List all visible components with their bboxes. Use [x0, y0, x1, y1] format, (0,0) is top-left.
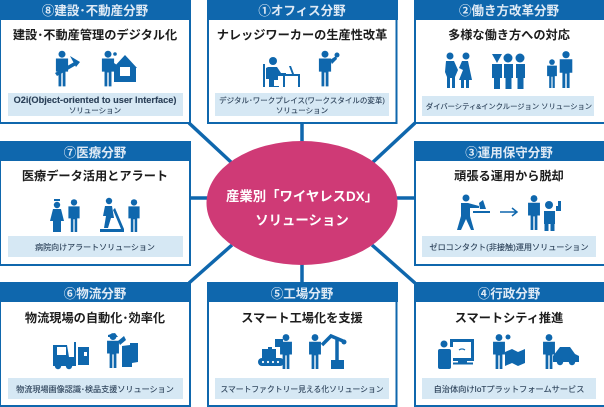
icon: forklift and inspector [53, 333, 138, 369]
connector lines [189, 122, 415, 284]
title: 2: 多様な働き方への対応 [448, 27, 570, 42]
title: 4: スマートシティ推進 [455, 310, 563, 325]
heading: 4: ④行政分野 [478, 286, 541, 301]
title: 3: 頑張る運用から脱却 [454, 168, 564, 183]
heading: 2: ②働き方改革分野 [459, 3, 559, 18]
heading: 8: ⑧建設･不動産分野 [42, 3, 149, 18]
panel: 8 construction [0, 0, 191, 123]
solution label: 6 [8, 378, 183, 399]
solution label: 5: スマートファクトリー見える化ソリューション [220, 385, 384, 394]
heading: 5: ⑤工場分野 [271, 286, 334, 301]
panel: 7 medical [0, 141, 191, 265]
icon: diverse people [445, 51, 572, 89]
panel: 1 office [207, 0, 398, 123]
solution label: 8: ソリューション [69, 106, 121, 115]
title: 1: ナレッジワーカーの生産性改革 [217, 27, 387, 42]
solution label: 4 [422, 378, 596, 399]
solution label: 2 [422, 96, 594, 116]
icon: worker to robot [457, 194, 561, 231]
solution label: 3: ゼロコンタクト(非接触)運用ソリューション [429, 242, 589, 252]
solution label: 4: 自治体向けIoTプラットフォームサービス [434, 384, 584, 394]
icon: screen, map, car [438, 334, 579, 369]
icon: worker and smart house [55, 51, 137, 86]
solution label: 7: 病院向けアラートソリューション [35, 242, 155, 252]
panel: 6 logistics [0, 282, 191, 406]
heading: 3: ③運用保守分野 [465, 145, 553, 160]
solution label: 8 [8, 93, 183, 116]
title: 5: スマート工場化を支援 [241, 310, 363, 325]
icon: desk worker and idea person [263, 51, 340, 87]
icon: medical staff and rehab [50, 198, 140, 232]
title: 6: 物流現場の自動化･効率化 [25, 310, 165, 325]
panel: 3 maintenance [414, 141, 604, 265]
solution label: 5 [215, 378, 389, 399]
panel: 4 government [414, 282, 604, 406]
solution label: 8: O2i(Object-oriented to user Interface) [14, 95, 176, 105]
panel: 5 factory [207, 282, 398, 406]
solution label: 1: デジタル･ワークプレイス(ワークスタイルの変革) [219, 95, 385, 105]
solution label: 7 [8, 236, 183, 257]
solution label: 1: ソリューション [276, 106, 328, 115]
arrow [500, 208, 517, 216]
solution label: 2: ダイバーシティ&インクルージョン ソリューション [426, 102, 592, 111]
solution label: 3 [422, 236, 596, 257]
title: 7: 医療データ活用とアラート [22, 168, 168, 183]
central ellipse: title [206, 141, 398, 265]
solution label: 6: 物流現場画像認識･検品支援ソリューション [16, 384, 174, 394]
heading: 1: ①オフィス分野 [258, 4, 346, 18]
heading: 7: ⑦医療分野 [64, 145, 127, 160]
icon: conveyor and robot arm [258, 334, 346, 369]
title: 8: 建設･不動産管理のデジタル化 [13, 27, 177, 42]
solution label: 1 [215, 93, 389, 116]
central ellipse: title: ソリューション [255, 213, 349, 228]
heading: 6: ⑥物流分野 [64, 286, 127, 301]
panel: 2 work style [414, 0, 604, 123]
central ellipse: title: 産業別「ワイヤレスDX」 [226, 188, 378, 204]
